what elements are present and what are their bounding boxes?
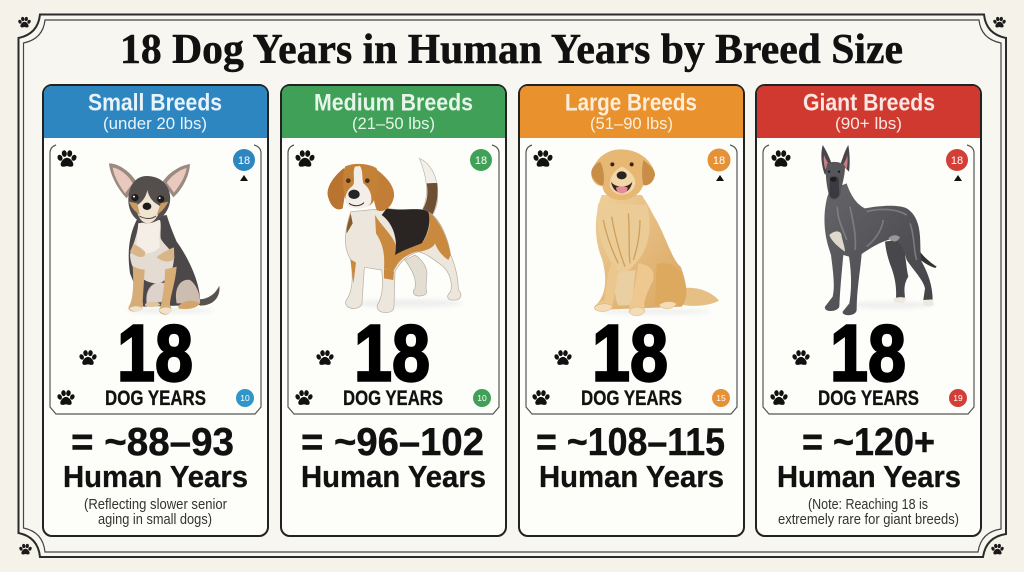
badge: top: 18: [475, 155, 487, 167]
badge: bottom: [712, 389, 730, 407]
badge: bottom: [473, 389, 491, 407]
result: human age: = ~88–93: [71, 421, 234, 464]
result label: Human Years: [63, 459, 248, 494]
badge: bottom: 15: [716, 393, 726, 403]
illustration: great dane: [821, 145, 937, 315]
note: [778, 497, 959, 528]
header: large breeds: (51–90 lbs): [590, 115, 673, 133]
header: large breeds: [520, 86, 743, 138]
illustration: golden retriever: [591, 149, 719, 316]
panel: large breeds: [519, 85, 744, 536]
header: giant breeds: [757, 86, 980, 138]
badge: bottom: [949, 389, 967, 407]
label: dog years: DOG YEARS: [105, 387, 206, 410]
badge: bottom: 10: [477, 393, 487, 403]
illustration: chihuahua: [109, 163, 219, 315]
result: human age: = ~96–102: [301, 421, 484, 464]
badge: bottom: 10: [240, 393, 250, 403]
header: large breeds: Large Breeds: [565, 90, 697, 116]
result label: Human Years: [301, 459, 486, 494]
header: medium breeds: [282, 86, 505, 138]
label: dog years: DOG YEARS: [343, 387, 443, 410]
icon: paws: [770, 150, 810, 405]
result label: Human Years: [539, 459, 724, 494]
illustration: beagle: [328, 158, 463, 313]
badge: bottom: 19: [953, 393, 963, 403]
badge: top: 18: [238, 155, 250, 167]
title: 18 Dog Years in Human Years by Breed Size: [120, 27, 903, 73]
badge: top: [470, 149, 492, 171]
big number: 18: [354, 308, 430, 398]
note: aging in small dogs): [98, 512, 212, 528]
label: dog years: DOG YEARS: [818, 387, 919, 410]
big number: 18: [117, 308, 193, 398]
panel: small breeds: [43, 85, 268, 536]
result label: Human Years: [777, 459, 961, 494]
badge: top: 18: [951, 155, 963, 167]
header: giant breeds: (90+ lbs): [835, 115, 902, 133]
note: extremely rare for giant breeds): [778, 512, 959, 528]
note: (Note: Reaching 18 is: [808, 497, 928, 513]
header: small breeds: [44, 86, 267, 138]
header: small breeds: (under 20 lbs): [103, 115, 207, 133]
panel: giant breeds: [756, 85, 981, 536]
icon: paws: [295, 150, 334, 405]
big number: 18: [830, 308, 906, 398]
badge: top: [233, 149, 255, 181]
result: human age: = ~108–115: [536, 421, 725, 464]
badge: top: [946, 149, 968, 181]
big number: 18: [592, 308, 668, 398]
result: human age: = ~120+: [802, 421, 935, 464]
icon: paws: [532, 150, 572, 405]
header: giant breeds: Giant Breeds: [803, 90, 935, 116]
label: dog years: DOG YEARS: [581, 387, 682, 410]
header: medium breeds: Medium Breeds: [314, 90, 473, 116]
note: (Reflecting slower senior: [84, 497, 227, 513]
badge: top: 18: [713, 155, 725, 167]
icon: paws: [57, 150, 97, 405]
header: medium breeds: (21–50 lbs): [352, 115, 435, 133]
badge: top: [708, 148, 730, 181]
note: [84, 497, 227, 528]
header: small breeds: Small Breeds: [88, 90, 222, 116]
badge: bottom: [236, 389, 254, 407]
panel: medium breeds: [281, 85, 506, 536]
